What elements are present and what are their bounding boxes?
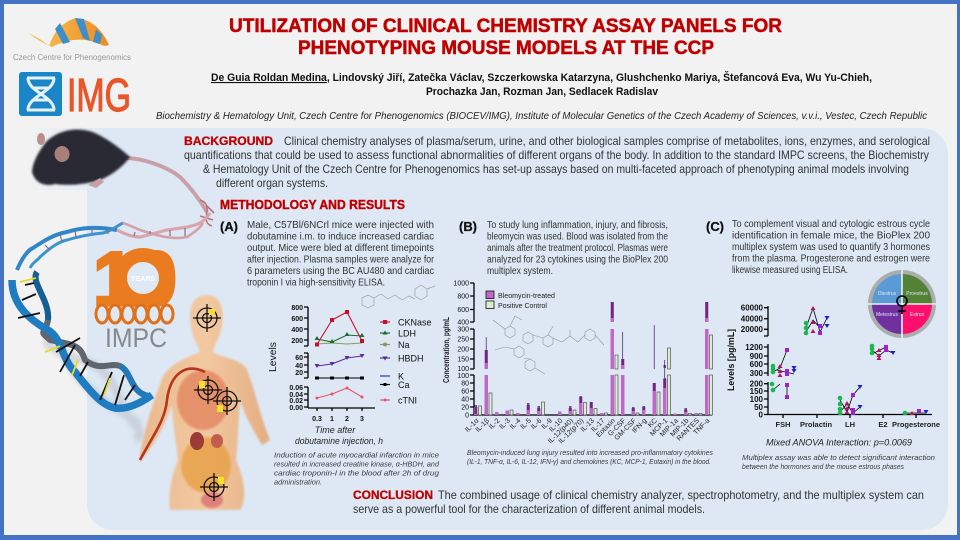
bar chart B: 600 bbox=[457, 307, 469, 314]
caption C: between the hormones and the mouse estrous phases bbox=[742, 462, 904, 471]
background section bbox=[184, 134, 930, 190]
affiliation: Biochemistry & Hematology Unit, Czech Centre for Phenogenomics (BIOCEV/IMG), Institute of Molecular Genetics of the Czech Academy of Sciences, v.v.i., Vestec, Czech Republic bbox=[156, 111, 927, 122]
bar chart B: 100 bbox=[457, 373, 469, 380]
caption A: administration. bbox=[274, 478, 322, 486]
logo: IMPC 10 years: YEARS bbox=[131, 276, 155, 283]
bar chart B: 0 bbox=[465, 412, 469, 420]
dot plot C: 60000 bbox=[741, 304, 764, 312]
bar chart B: 250 bbox=[457, 336, 469, 344]
bar chart B: 40 bbox=[461, 396, 469, 404]
line chart A: 2 bbox=[345, 416, 349, 423]
label A: (A) bbox=[220, 219, 238, 234]
illustration: human anatomy with targets bbox=[139, 295, 270, 510]
line chart A: 400 bbox=[291, 327, 303, 334]
dot plot C: 1200 bbox=[745, 343, 764, 352]
text block B: animals after the treatment protocol. Plasmas were bbox=[487, 243, 668, 254]
logo: Czech Centre for Phenogenomics bbox=[13, 18, 131, 62]
x-axis cytokine labels: GM-CSF bbox=[613, 417, 638, 442]
caption C: Multiplex assay was able to detect significant interaction bbox=[742, 453, 935, 462]
text block B: multiplex system. bbox=[487, 266, 553, 277]
line chart A: 800 bbox=[291, 305, 303, 312]
text block A: dobutamine i.m. to induce increased cardiac bbox=[247, 232, 434, 242]
caption B bbox=[467, 448, 713, 466]
bar chart B: 60 bbox=[461, 388, 469, 396]
logo: IMPC 10 years: IMPC bbox=[105, 323, 167, 353]
title: PHENOTYPING MOUSE MODELS AT THE CCP bbox=[298, 38, 714, 59]
icon: female symbol bbox=[897, 296, 907, 314]
dot plot C: 600 bbox=[750, 360, 764, 369]
line chart A: 200 bbox=[291, 338, 303, 345]
line chart A: 0.02 bbox=[289, 398, 303, 405]
text block A: Male, C57Bl/6NCrl mice were injected with bbox=[247, 220, 434, 231]
title bbox=[229, 16, 782, 59]
text block C: multiplex system was used to quantify 3 hormones bbox=[732, 242, 930, 253]
x-axis cytokine labels: G-CSF bbox=[607, 417, 627, 438]
x-axis cytokine labels: MIP-1a bbox=[659, 417, 680, 438]
legend B: Bleomycin-treated bbox=[498, 293, 555, 300]
line chart A: 0.06 bbox=[289, 385, 303, 392]
dot plot C: 40000 bbox=[741, 314, 764, 324]
authors: Prochazka Jan, Rozman Jan, Sedlacek Radislav bbox=[426, 86, 659, 98]
title: UTILIZATION OF CLINICAL CHEMISTRY ASSAY PANELS FOR bbox=[229, 16, 782, 37]
x-axis cytokine labels: Eotaxin bbox=[595, 417, 617, 439]
legend A: K bbox=[398, 372, 404, 382]
line chart A: 0.3 bbox=[312, 416, 322, 423]
text block C bbox=[732, 219, 931, 276]
line chart A: 0.00 bbox=[289, 405, 303, 412]
purple bars bbox=[474, 302, 708, 415]
positive control bars bbox=[478, 335, 712, 415]
logo: IMG: IMG bbox=[67, 69, 131, 121]
upper strand bbox=[17, 228, 117, 270]
bar chart B: 20 bbox=[461, 404, 469, 412]
text block C: from the plasma. Progesterone and estrogen were bbox=[732, 254, 930, 264]
dot plot C: LH bbox=[845, 420, 855, 429]
green points bbox=[770, 321, 907, 415]
text block A: output. Mice were bled at different timepoints bbox=[247, 243, 434, 254]
x-axis cytokine labels: IL-9 bbox=[540, 417, 554, 431]
line chart A: 20 bbox=[295, 370, 303, 377]
x-axis cytokine labels: MIP-1b bbox=[670, 417, 690, 438]
pink points bbox=[778, 306, 914, 415]
caption A: Induction of acute myocardial infarction in mice bbox=[274, 450, 439, 460]
x-axis cytokine labels: IL-17 bbox=[590, 417, 606, 434]
illustration: DNA helix bbox=[12, 213, 210, 440]
bar chart B: 800 bbox=[457, 294, 469, 300]
line chart A: 1 bbox=[330, 416, 334, 423]
logo: IMPC 10 years: 10 bbox=[93, 237, 177, 322]
connecting lines bbox=[773, 308, 926, 413]
text block C: likewise measured using ELISA. bbox=[732, 265, 848, 276]
logo: IMG bbox=[19, 69, 131, 121]
line chart A bbox=[267, 305, 432, 446]
x-axis cytokine labels: TNF-a bbox=[692, 417, 711, 436]
x-axis cytokine labels: IL-12(p70) bbox=[558, 417, 585, 445]
x-axis cytokine labels: IL-12(p40) bbox=[547, 417, 575, 445]
bar chart B: 150 bbox=[457, 356, 469, 364]
conclusion: serve as a powerful tool for the characterization of different animal models. bbox=[353, 502, 705, 516]
bar chart B: 1000 bbox=[453, 280, 469, 288]
legend A: Ca bbox=[398, 380, 410, 390]
x-axis cytokine labels: IFN-g bbox=[631, 417, 648, 435]
line chart A: 0.04 bbox=[289, 392, 303, 399]
legend B bbox=[486, 291, 555, 310]
x-axis cytokine labels: IL-1α bbox=[464, 417, 480, 434]
dot plot C: 100 bbox=[750, 395, 764, 404]
dot plot C: 200 bbox=[750, 380, 764, 388]
bar chart B: 100 bbox=[457, 366, 469, 373]
legend A: Na bbox=[398, 340, 410, 350]
dot plot C: Progesterone bbox=[892, 420, 940, 429]
dot plot C: 50 bbox=[754, 403, 764, 412]
line chart A: 3 bbox=[360, 416, 364, 423]
purple points bbox=[785, 324, 921, 415]
dot plot C: Levels [pg/mL] bbox=[726, 329, 736, 391]
conclusion: CONCLUSION bbox=[353, 490, 433, 502]
text block A: troponin I via high-sensitivity ELISA. bbox=[247, 278, 385, 288]
x-axis cytokine labels: KC bbox=[647, 417, 659, 429]
text block A: after injection. Plasma samples were analyze for bbox=[247, 254, 435, 266]
dot plot C: E2 bbox=[878, 420, 888, 429]
diagram: estrous cycle wheel: Diestrus bbox=[878, 291, 897, 297]
x-axis cytokine labels: IL-10 bbox=[548, 417, 564, 434]
section B bbox=[442, 219, 713, 466]
x-axis cytokine labels: IL-4 bbox=[509, 417, 522, 431]
legend A: HBDH bbox=[398, 354, 424, 364]
bar chart B bbox=[442, 280, 712, 445]
line chart A: Levels bbox=[267, 342, 279, 372]
dot plot C bbox=[726, 304, 940, 429]
authors bbox=[211, 71, 872, 98]
line chart A: dobutamine injection, h bbox=[295, 436, 383, 446]
caption C bbox=[742, 453, 935, 471]
legend A: cTNI bbox=[398, 396, 417, 406]
diagram: estrous cycle wheel: Proestrus bbox=[906, 291, 928, 297]
caption A: cardiac troponin-I in the blood after 2h of drug bbox=[274, 468, 440, 478]
caption A: resulted in increased creatine kinase, α-HBDH, and bbox=[274, 460, 440, 468]
background section: BACKGROUND bbox=[184, 134, 273, 148]
text block B: To study lung inflammation, injury, and fibrosis, bbox=[487, 220, 668, 231]
bar chart B: 200 bbox=[457, 346, 469, 354]
text block B bbox=[487, 220, 669, 277]
x-axis cytokine labels: IL-5 bbox=[519, 417, 533, 431]
background section: different organ systems. bbox=[216, 176, 328, 190]
legend A: LDH bbox=[398, 328, 416, 338]
legend B: Positive Control bbox=[498, 303, 547, 310]
text block A bbox=[247, 220, 435, 288]
diagram: estrous cycle wheel: Estrus bbox=[910, 312, 925, 318]
caption A bbox=[274, 450, 440, 486]
text block C: identification in female mice, the BioPlex 200 bbox=[732, 230, 931, 242]
diagram: estrous cycle wheel bbox=[868, 270, 936, 338]
x-axis cytokine labels: MCP-1 bbox=[649, 417, 669, 438]
dot plot C: 20000 bbox=[741, 325, 764, 334]
authors: De Guia Roldan Medina, Lindovský Jiří, Zatečka Václav, Szczerkowska Katarzyna, Glushchenko Mariya, Štefancová Eva, Wu Yu-Chieh, bbox=[211, 71, 872, 84]
bar chart B: Concentration, pg/mL bbox=[442, 317, 451, 383]
text block B: analyzed for 23 cytokines using the BioPlex 200 bbox=[487, 254, 669, 266]
illustration: mouse bbox=[32, 130, 214, 226]
heading: methodology and results: METHODOLOGY AND RESULTS bbox=[220, 197, 405, 212]
dot plot C: 0 bbox=[759, 410, 764, 420]
conclusion bbox=[353, 488, 924, 516]
text block C: To complement visual and cytologic estrous cycle bbox=[732, 219, 930, 230]
conclusion: The combined usage of clinical chemistry analyzer, spectrophotometry, and the multiplex system can bbox=[438, 488, 924, 502]
legend A bbox=[380, 318, 432, 406]
diagram: estrous cycle wheel: Metestrus bbox=[876, 312, 898, 318]
line chart A: 600 bbox=[291, 316, 303, 323]
logo: Czech Centre for Phenogenomics: Czech Centre for Phenogenomics bbox=[13, 52, 131, 62]
legend A: CKNase bbox=[398, 318, 432, 328]
dot plot C: Prolactin bbox=[800, 420, 832, 429]
label C: (C) bbox=[706, 219, 724, 234]
dot plot C: 300 bbox=[750, 369, 764, 378]
caption B: Bleomycin-induced lung injury resulted into increased pro-inflammatory cytokines bbox=[467, 448, 713, 457]
dot plot C: FSH bbox=[776, 420, 790, 429]
label B: (B) bbox=[459, 219, 477, 234]
dot plot C: 150 bbox=[750, 387, 764, 396]
data dots bbox=[474, 302, 708, 414]
x-axis cytokine labels bbox=[464, 417, 711, 445]
bar chart B: 400 bbox=[457, 320, 469, 326]
dot plot C: 900 bbox=[750, 352, 764, 361]
x-axis cytokine labels: IL-1β bbox=[475, 417, 491, 434]
bar chart B: 300 bbox=[457, 326, 469, 334]
section C bbox=[706, 219, 940, 471]
line chart A: 40 bbox=[295, 363, 303, 370]
caption B: (IL-1, TNF-α, IL-6, IL-12, IFN-γ) and chemokines (KC, MCP-1, Eotaxin) in the blood. bbox=[467, 457, 711, 466]
x-axis cytokine labels: IL-13 bbox=[580, 417, 596, 434]
x-axis cytokine labels: IL-2 bbox=[488, 417, 501, 431]
bar chart B: 80 bbox=[461, 380, 469, 388]
blue points bbox=[792, 316, 928, 414]
x-axis cytokine labels: RANTES bbox=[676, 417, 701, 443]
section A bbox=[220, 219, 440, 486]
ANOVA result: Mixed ANOVA Interaction: p=0.0069 bbox=[766, 438, 913, 448]
panel: main content background bbox=[30, 128, 948, 530]
text block A: 6 parameters using the BC AU480 and cardiac bbox=[247, 266, 434, 277]
icon: bleomycin molecule bbox=[493, 316, 604, 374]
icon: dobutamine molecule bbox=[362, 285, 435, 308]
lower strand bbox=[36, 272, 148, 396]
line chart A: Time after bbox=[315, 425, 356, 435]
text block B: bleomycin was used. Blood was isolated from the bbox=[487, 232, 668, 242]
line chart A: 60 bbox=[295, 355, 303, 362]
x-axis cytokine labels: IL-6 bbox=[530, 417, 543, 431]
x-axis cytokine labels: IL-3 bbox=[498, 417, 512, 431]
